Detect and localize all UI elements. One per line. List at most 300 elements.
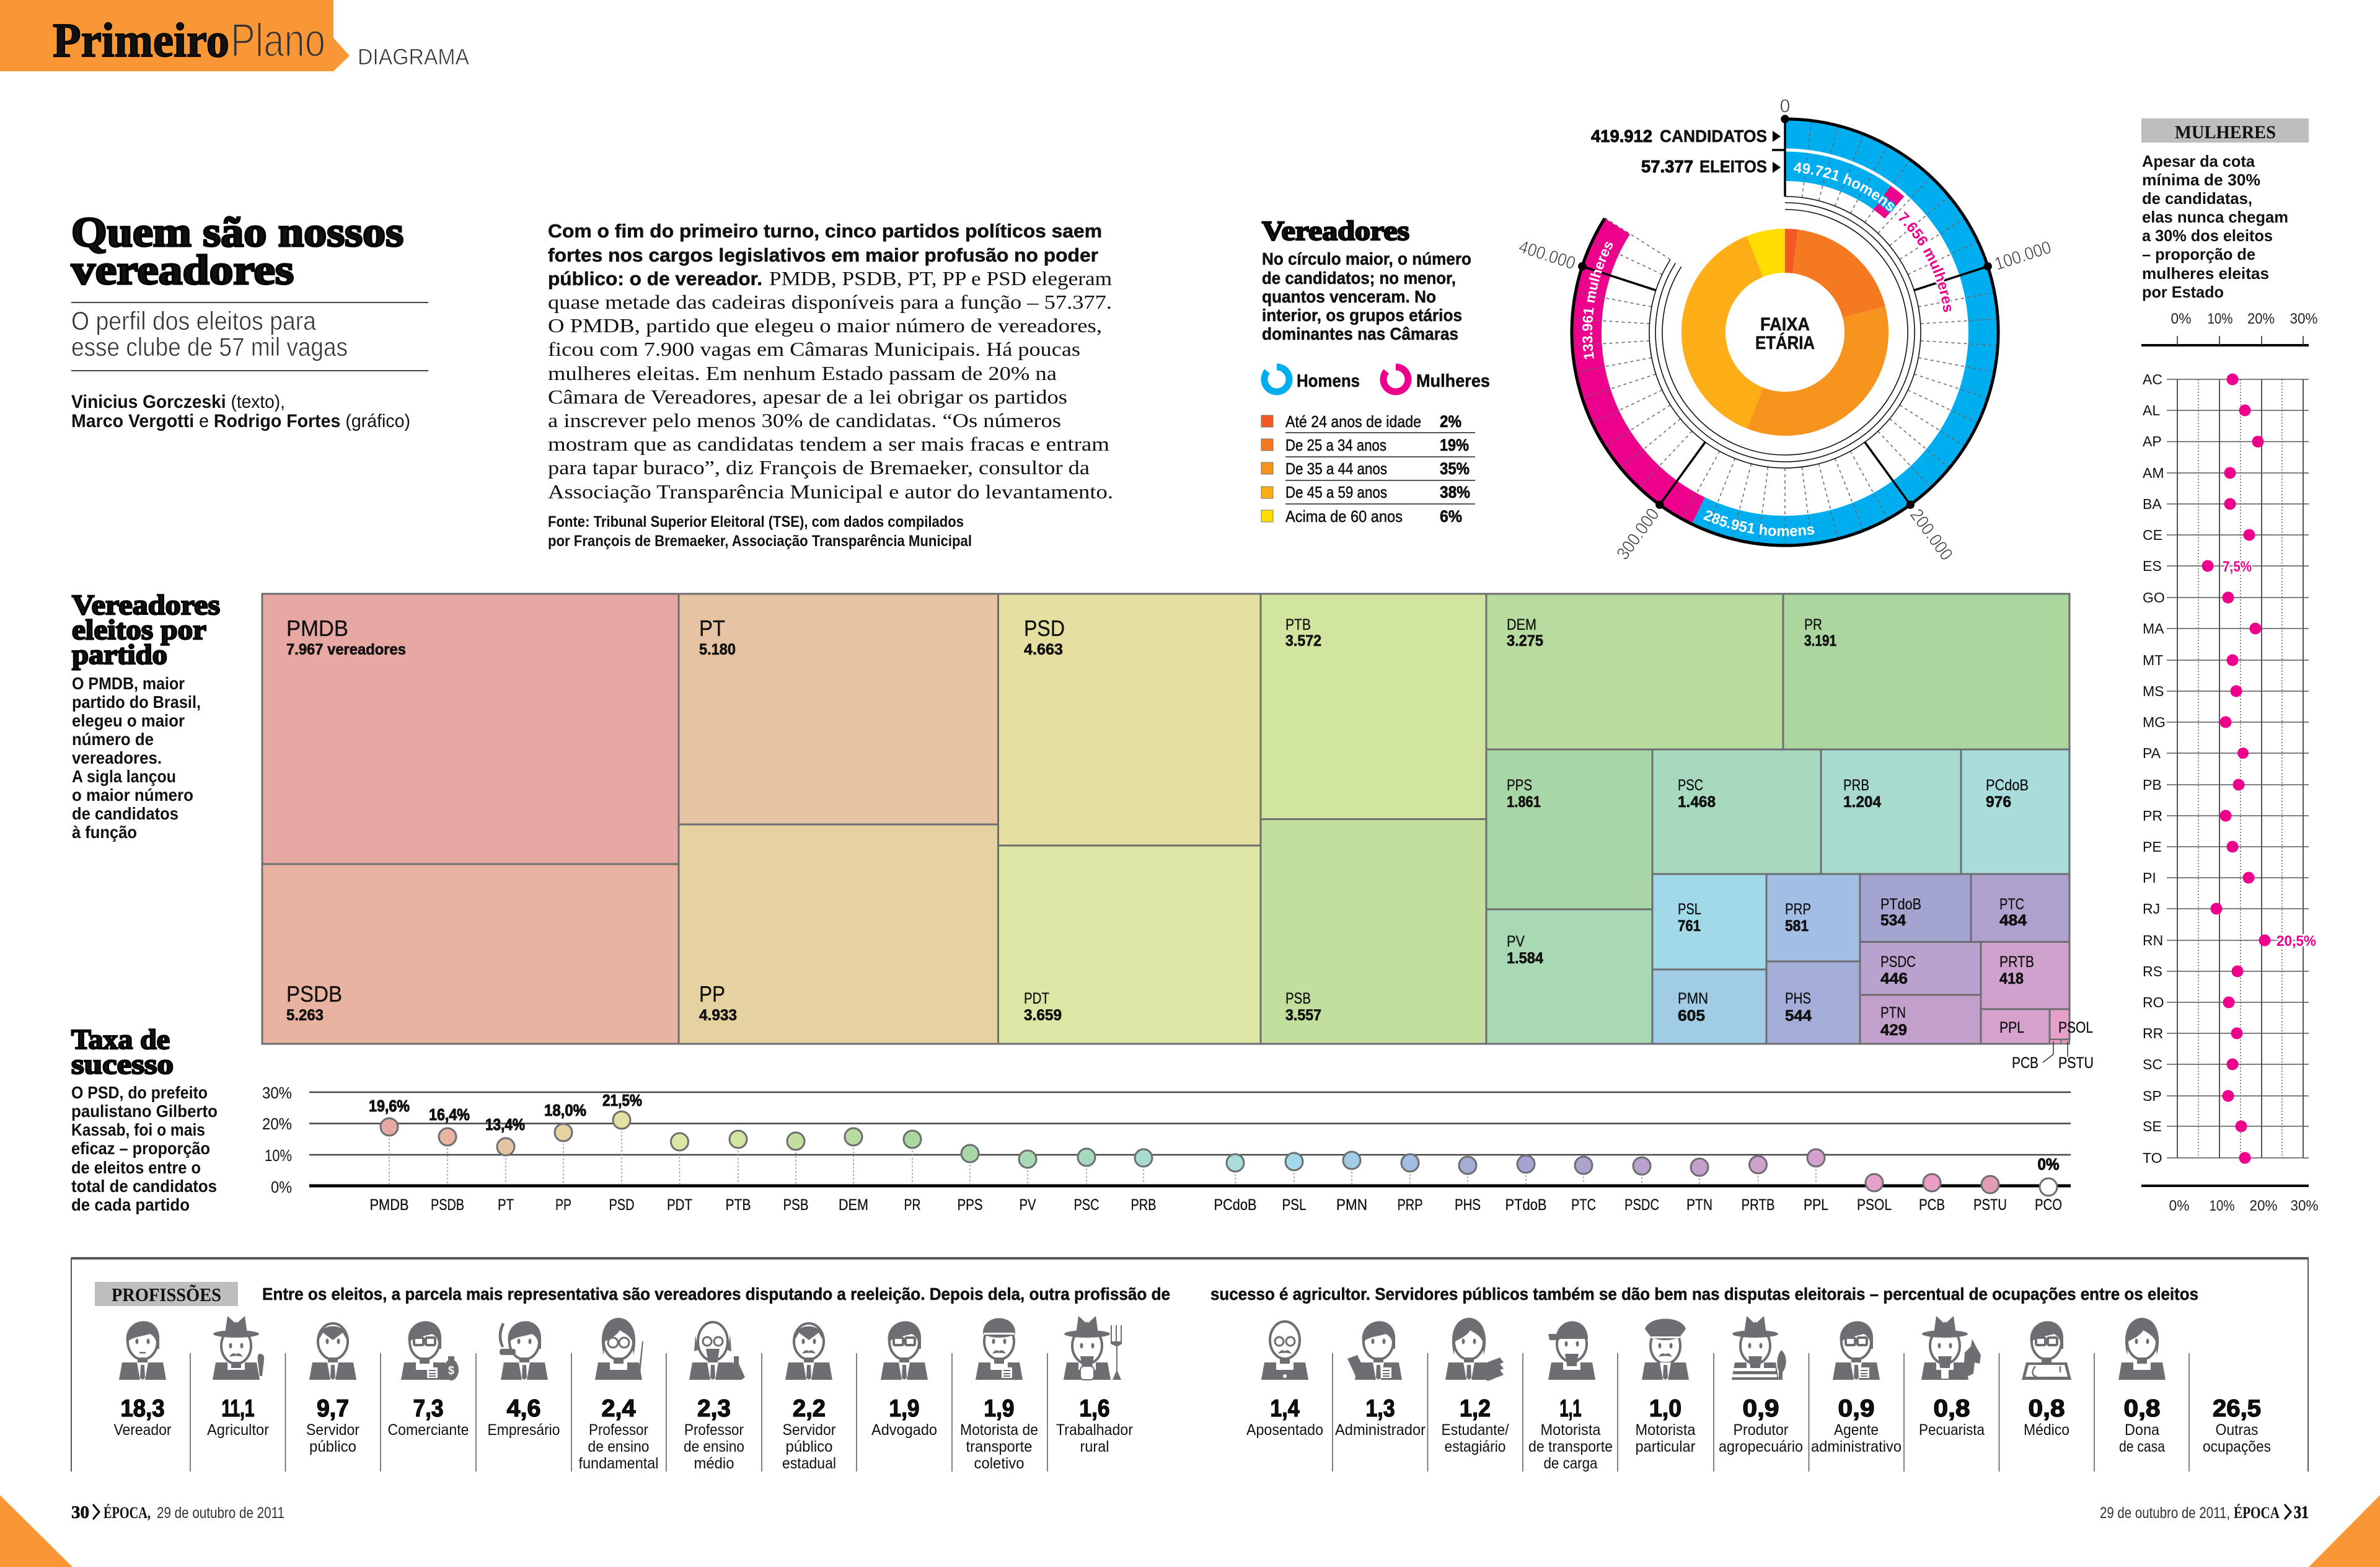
state labels: PR [2143,808,2162,824]
intro text: público: o de vereador. [548,268,762,289]
bottom axis: 30% [2291,1198,2318,1214]
PV: 1.584 [1507,950,1543,967]
values: professions, first half: 18,3 [120,1395,165,1422]
party labels: PPS [957,1196,983,1214]
party labels [369,1196,2062,1214]
party labels: PCB [1919,1196,1945,1214]
PSL: PSL [1678,901,1701,918]
y axis labels [262,1084,292,1196]
DEM: DEM [1507,616,1536,633]
text: treemap explanation: A sigla lançou [72,767,176,786]
explanation text: mulheres eleitas [2142,264,2269,283]
heading: taxa de sucesso: Taxa de [71,1023,170,1055]
state labels: RN [2143,932,2163,948]
state labels: RJ [2143,901,2160,917]
value labels: 18,0% [544,1101,586,1119]
ring label: 285.951 homens: 285.951 homens [1703,511,1815,537]
party labels: PSB [783,1196,808,1214]
party labels: PPL [1804,1196,1828,1214]
labels: professions, first half: Vereador [114,1421,171,1439]
value labels: 16,4% [429,1105,470,1124]
explanation text: elas nunca chegam [2142,208,2288,226]
panel: professions [71,1257,2309,1472]
intro text: quase metade das cadeiras disponíveis para a função – 57.377. [548,291,1112,313]
party labels: PSD [609,1196,635,1214]
panel: vereadores explanation [1261,216,1490,526]
text: success rate explanation: total de candidatos [71,1176,217,1196]
state labels [2143,371,2166,1166]
value labels: 0% [2038,1155,2059,1173]
PSDC: PSDC [1880,953,1916,971]
intro text: PMDB, PSDB, PT, PP e PSD elegeram [769,267,1112,289]
values: professions, first half: 9,7 [317,1395,349,1422]
footer: left page: ÉPOCA, [104,1504,151,1522]
values: professions, second half: 26,5 [2213,1395,2261,1422]
top axis: 30% [2290,311,2318,327]
labels: professions, second half: particular [1635,1438,1696,1455]
PSD [998,594,1261,845]
labels: professions, second half: Agente [1834,1421,1879,1439]
PCB and PSTU: PSTU [2058,1054,2094,1072]
intro text: fortes nos cargos legislativos em maior profusão no poder [548,244,1098,266]
PHS: 544 [1785,1007,1812,1025]
PRP: PRP [1785,901,1811,918]
scale labels: 200.000 [1906,505,1956,564]
state labels: RS [2143,963,2162,979]
PSD: 4.663 [1024,641,1063,658]
section header tab: Primeiro Plano [0,0,350,71]
DEM [1486,594,1783,749]
y axis labels: 0% [271,1178,292,1196]
intro text: O PMDB, partido que elegeu o maior número de vereadores, [548,314,1102,337]
labels: professions, second half: Administrador [1335,1421,1426,1439]
value labels: 13,4% [485,1115,525,1134]
labels: professions, second half: Aposentado [1246,1421,1323,1439]
labels: professions, first half: Agricultor [207,1421,269,1439]
legend table: age groups [1261,412,1475,526]
footer: right page: 29 de outubro de 2011, [2100,1504,2230,1522]
PCB and PSTU [2012,1040,2094,1072]
values: professions, first half [120,1395,1109,1422]
PSB: 3.557 [1285,1007,1321,1024]
party labels: PV [1019,1196,1036,1214]
legend: homens [1264,367,1360,392]
party labels: PRTB [1742,1196,1775,1214]
PTC [1971,874,2069,942]
text: treemap explanation: vereadores. [72,748,162,767]
labels: professions, second half: Produtor [1733,1421,1789,1439]
explanation text: interior, os grupos etários [1262,306,1462,325]
scale labels: 100.000 [1992,237,2054,275]
source note [548,513,972,550]
subtitle [71,302,428,371]
value labels: 19,6% [369,1097,410,1115]
values: professions, second half: 1,2 [1460,1395,1491,1422]
labels: professions, first half: Empresário [487,1421,560,1439]
icon: Advogado [881,1321,928,1380]
footer: right page: ÉPOCA [2234,1504,2280,1522]
text: treemap explanation: o maior número [72,785,193,805]
labels: professions, second half: Dona [2125,1421,2159,1439]
icon: Vereador [119,1321,166,1380]
state labels: AC [2143,371,2162,387]
PSC: 1.468 [1678,793,1716,811]
text: treemap explanation: de candidatos [72,804,178,823]
party labels: PSL [1282,1196,1307,1214]
callout: 20,5%: 20,5% [2276,933,2316,950]
text: treemap explanation [72,674,201,842]
labels: professions, first half: Motorista de [960,1421,1038,1439]
PPL: PPL [1999,1019,2024,1036]
PSDB: 5.263 [286,1007,324,1024]
icon: Médico [2022,1321,2071,1380]
value labels [369,1091,2059,1173]
legend table: age groups: De 35 a 44 anos [1285,459,1387,478]
ring label: 49.721 homens: 49.721 homens [1794,162,1895,212]
PMDB: 7.967 vereadores [286,641,406,658]
intro text: mulheres eleitas. Em nenhum Estado passam de 20% na [548,362,1057,384]
text: treemap explanation: número de [72,730,154,749]
labels: professions, first half: de ensino [588,1438,650,1455]
heading: vereadores eleitos por partido [72,589,220,670]
label: candidates count [1591,126,1781,146]
inner ring: elected [1785,166,1895,208]
PTB: PTB [1285,616,1311,633]
legend table: age groups: De 25 a 34 anos [1285,436,1386,454]
bottom axis: 10% [2209,1198,2235,1214]
scale labels: 0 [1780,96,1790,117]
source note: por François de Bremaeker, Associação Transparência Municipal [548,532,972,550]
PSDC: 446 [1880,970,1908,987]
PSOL: PSOL [2058,1019,2093,1036]
intro text: ficou com 7.900 vagas em Câmaras Municipais. Há poucas [548,338,1080,360]
PSB: PSB [1285,990,1311,1007]
values: professions, first half: 11,1 [222,1395,254,1422]
scale marks [1579,116,1991,509]
PPL [1981,1009,2050,1044]
values: professions, first half: 2,4 [601,1395,636,1422]
PT: 5.180 [699,641,736,658]
legend table: age groups: 6% [1440,507,1462,526]
icon: Dona de casa [2118,1318,2166,1380]
intro text: Associação Transparência Municipal e autor do levantamento. [548,480,1113,503]
text: treemap explanation: elegeu o maior [72,711,185,730]
values: professions, second half [1271,1395,2261,1422]
state labels: RR [2143,1025,2163,1041]
PSC: PSC [1678,777,1703,794]
dot plot: women elected per state [2141,311,2318,1214]
intro text: Com o fim do primeiro turno, cinco partidos políticos saem [548,220,1102,242]
heading: Mulheres: MULHERES [2175,122,2276,143]
label: candidates count: 419.912 [1591,126,1652,146]
radial chart: candidates and elected by gender [1516,96,2054,564]
PRB: 1.204 [1843,793,1881,811]
party labels: PDT [667,1196,692,1214]
PDT: 3.659 [1024,1007,1062,1024]
label: elected count [1641,157,1781,176]
DEM: 3.275 [1507,632,1543,650]
heading: taxa de sucesso: sucesso [71,1048,174,1080]
labels: professions, second half: ocupações [2203,1438,2271,1455]
ring label: 7.656 mulheres: 7.656 mulheres [1898,211,1951,312]
state labels: GO [2143,589,2165,606]
labels: professions, second half: Pecuarista [1919,1421,1985,1439]
party labels: PTB [725,1196,751,1214]
icon: Agricultor [213,1316,264,1380]
title: vereadores [71,246,294,293]
PCdoB: 976 [1986,793,2011,811]
heading: taxa de sucesso [71,1023,174,1080]
lead text: sucesso é agricultor. Servidores públicos também se dão bem nas disputas eleitorais – percentual de ocupações entre os eleitos [1210,1284,2198,1304]
state labels: PI [2143,870,2156,886]
lollipop chart: success rate by party [262,1084,2071,1214]
PRTB: 418 [1999,970,2024,987]
legend table: age groups: Até 24 anos de idade [1285,412,1421,431]
party bubbles [381,1111,2057,1196]
PTN: PTN [1880,1004,1906,1022]
explanation text [2142,152,2288,301]
PTN: 429 [1880,1022,1907,1039]
explanation text: No círculo maior, o número [1262,249,1471,268]
icon: Aposentado [1261,1322,1308,1380]
legend table: age groups: De 45 a 59 anos [1285,483,1387,501]
PMN [1652,969,1766,1044]
PRTB [1981,942,2069,1009]
explanation text: mínima de 30% [2142,170,2260,189]
PTC: 484 [1999,912,2027,929]
party labels: PCO [2035,1196,2062,1214]
PSOL [2050,1009,2093,1040]
scale labels: 300.000 [1613,505,1664,563]
scale labels [1516,96,2054,564]
PT [679,594,998,824]
treemap: councillors elected by party [262,594,2094,1072]
text: success rate explanation: de eleitos entre o [71,1158,201,1177]
heading: Vereadores: Vereadores [1262,216,1409,246]
donut chart: age groups [1681,229,1889,436]
footer: right page: 31 [2294,1503,2309,1522]
party labels: PRB [1130,1196,1157,1214]
intro text: Câmara de Vereadores, apesar de a lei obrigar os partidos [548,386,1067,408]
party labels: PSTU [1973,1196,2007,1214]
subtitle: O perfil dos eleitos para [71,306,317,335]
legend: mulheres: Mulheres [1416,371,1490,391]
explanation text: por Estado [2142,283,2224,301]
labels: professions, second half: de casa [2119,1438,2165,1455]
state labels: SC [2143,1056,2162,1072]
values: professions, second half: 0,9 [1743,1395,1779,1422]
legend: homens: Homens [1297,371,1360,391]
footer: left page: 30 [71,1503,89,1522]
state labels: PE [2143,839,2162,855]
explanation text: quantos venceram. No [1262,287,1436,306]
scale labels: 400.000 [1516,237,1578,274]
PTdoB: 534 [1880,912,1906,929]
legend table: age groups: 19% [1440,436,1469,454]
values: professions, second half: 0,8 [2123,1395,2161,1422]
legend table: age groups: 38% [1440,483,1470,501]
explanation text: de candidatos; no menor, [1262,268,1456,288]
top axis: 0% [2171,311,2192,327]
credits [71,392,410,431]
party labels: PSOL [1857,1196,1892,1214]
PR [1783,594,2069,749]
lead text [262,1284,2198,1304]
labels: professions, first half: transporte [966,1438,1033,1455]
labels: professions, first half: Servidor [782,1421,835,1439]
heading: vereadores eleitos por partido: partido [72,638,167,670]
intro text: mostram que as candidatas tendem a ser mais fracas e entram [548,433,1109,455]
labels: professions, second half: estagiário [1444,1438,1506,1455]
values: professions, first half: 1,9 [889,1395,920,1422]
PV: PV [1507,933,1525,950]
icon: Motorista de transporte coletivo [976,1318,1023,1380]
PCdoB [1961,749,2069,874]
party labels: PTN [1686,1196,1712,1214]
labels: professions, first half: rural [1080,1438,1109,1455]
PRP [1766,874,1860,961]
lead text: Entre os eleitos, a parcela mais representativa são vereadores disputando a reeleição. Depois dela, outra profissão de [262,1284,1170,1304]
title: Quem são nossos [71,208,403,255]
title [71,208,403,293]
PTdoB [1860,874,1971,942]
PP: PP [699,981,725,1007]
PP: 4.933 [699,1007,737,1024]
labels: professions, first half: Servidor [306,1421,359,1439]
explanation text: – proporção de [2142,245,2255,263]
ring label: 133.961 mulheres: 133.961 mulheres [1582,242,1613,360]
icon: Administrador [1347,1321,1402,1380]
PT: PT [699,616,725,641]
PHS [1766,961,1860,1044]
PSDB: PSDB [286,981,342,1007]
values: professions, second half: 0,9 [1838,1395,1874,1422]
values: professions, second half: 1,0 [1649,1395,1681,1422]
footer: left page [71,1503,284,1522]
legend table: age groups: 35% [1440,459,1470,478]
values: professions, first half: 4,6 [507,1395,540,1422]
state dots [2202,373,2271,1164]
state labels: SE [2143,1118,2162,1134]
values: professions, second half: 1,4 [1271,1395,1300,1422]
state labels: PA [2143,745,2161,761]
top axis [2141,311,2318,347]
credits: Vinicius Gorczeski (texto), [71,392,285,412]
state labels: TO [2143,1150,2162,1166]
state labels: PB [2143,777,2162,793]
labels: professions, second half: agropecuário [1719,1438,1803,1455]
PSL [1652,874,1766,969]
values: professions, first half: 2,2 [793,1395,826,1422]
PDT [998,845,1261,1044]
PSC [1652,749,1821,874]
party labels: PT [498,1196,514,1214]
icon: Servidor público estadual [785,1323,832,1380]
PR: PR [1804,616,1822,633]
donut center label [1755,314,1815,353]
state labels: AP [2143,433,2162,449]
icon: Pecuarista [1921,1316,1981,1380]
PTB [1261,594,1486,819]
PRTB: PRTB [1999,953,2034,971]
PSDC [1860,942,1981,995]
labels: professions, second half: de transporte [1528,1438,1613,1455]
party labels: PP [555,1196,571,1214]
party labels: PSDC [1624,1196,1659,1214]
bottom axis: 0% [2169,1198,2189,1214]
PSD: PSD [1024,616,1065,641]
explanation text: dominantes nas Câmaras [1262,324,1458,343]
icon: Estudante/estagiário [1445,1318,1504,1381]
values: professions, second half: 0,8 [2028,1395,2065,1422]
labels: professions, second half: Médico [2024,1421,2069,1439]
label: candidates count: CANDIDATOS [1660,126,1767,146]
PRP: 581 [1785,917,1809,935]
section header tab: Primeiro Plano: Plano [231,14,325,67]
PTC: PTC [1999,896,2024,913]
corner: bottom right [2309,1495,2380,1567]
state labels: CE [2143,527,2162,543]
labels: professions, second half: Estudante/ [1442,1421,1509,1439]
PDT: PDT [1024,990,1049,1007]
text: success rate explanation: de cada partido [71,1195,190,1214]
credits: Marco Vergotti e Rodrigo Fortes (gráfico) [71,411,410,431]
icon: Comerciante [401,1321,459,1380]
party labels: PHS [1455,1196,1481,1214]
PTN [1860,995,1981,1044]
icon: Trabalhador rural [1064,1316,1122,1380]
party labels: PSC [1073,1196,1100,1214]
PHS: PHS [1785,990,1811,1007]
PR: 3.191 [1804,632,1836,650]
icon: Professor de ensino fundamental [595,1318,643,1380]
state labels: RO [2143,994,2164,1010]
PPS [1486,749,1652,909]
labels: professions, first half [114,1421,1133,1472]
state labels: AL [2143,402,2160,418]
donut center label: ETÁRIA [1755,332,1815,353]
explanation text: Apesar da cota [2142,152,2255,170]
icon: Comerciante: $ [448,1364,454,1377]
text: success rate explanation: paulistano Gilberto [71,1101,218,1121]
PCdoB: PCdoB [1986,777,2029,794]
legend table: age groups: 2% [1440,412,1461,431]
party labels: PSDB [431,1196,464,1214]
labels: professions, first half: Trabalhador [1056,1421,1133,1439]
heading: Profissões: PROFISSÕES [112,1284,221,1305]
party labels: PTC [1571,1196,1596,1214]
PSL: 761 [1678,917,1701,935]
party labels: PRP [1397,1196,1423,1214]
values: professions, second half: 1,1 [1559,1395,1582,1422]
text: success rate explanation: Kassab, foi o mais [71,1120,205,1139]
state labels: ES [2143,558,2162,574]
state labels: MT [2143,652,2163,668]
panel: women per state [2141,118,2318,1214]
labels: professions, first half: fundamental [579,1455,658,1472]
label: elected count: ELEITOS [1699,157,1767,176]
footer: left page: 29 de outubro de 2011 [157,1504,284,1522]
values: professions, first half: 1,6 [1080,1395,1109,1422]
PP [679,824,998,1044]
icon: Empresário [499,1321,548,1380]
intro text: a inscrever pelo menos 30% de candidatas. “Os números [548,409,1061,431]
text: success rate explanation: O PSD, do prefeito [71,1083,208,1102]
heading: vereadores eleitos por partido: eleitos por [72,614,206,645]
PRB [1821,749,1961,874]
subtitle: esse clube de 57 mil vagas [71,332,348,361]
state labels: MA [2143,620,2164,637]
